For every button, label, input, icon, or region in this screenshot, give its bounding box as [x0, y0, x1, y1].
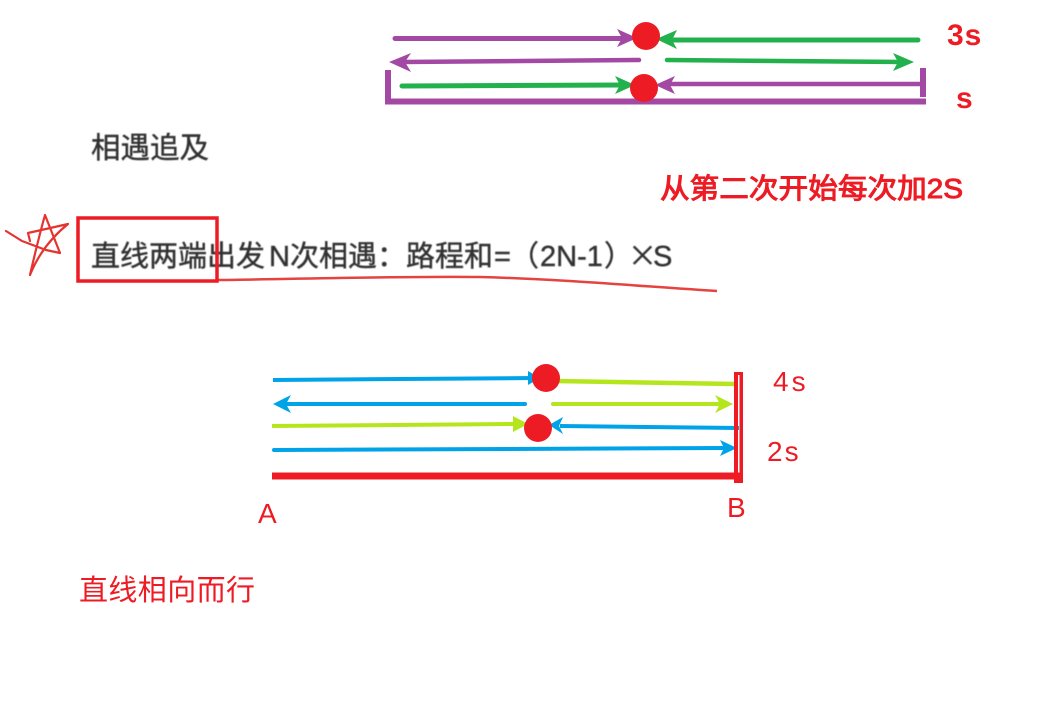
- arrow: purple return: [389, 53, 639, 72]
- arrow: blue return: [273, 395, 525, 413]
- meeting point: upper: [532, 364, 560, 392]
- arrow: lime second trip: [272, 416, 528, 432]
- label: s: s: [956, 82, 973, 115]
- underline stroke: [218, 277, 717, 291]
- formula: =: [494, 241, 511, 273]
- formula: N: [269, 241, 290, 273]
- formula: 2N-1: [540, 241, 603, 273]
- formula: （: [510, 241, 539, 273]
- arrow: green return: [667, 53, 914, 71]
- label: 4s: 4s: [773, 366, 809, 397]
- arrow: green first trip: [656, 30, 918, 49]
- formula: 直线两端出发: [91, 240, 265, 273]
- formula: S: [653, 241, 672, 273]
- meeting point: first: [632, 22, 660, 50]
- label: A: A: [258, 498, 277, 529]
- meeting point: lower: [524, 414, 552, 442]
- formula: ×: [628, 233, 657, 275]
- B end wall: [734, 372, 743, 483]
- caption: 直线相向而行: [79, 574, 255, 607]
- formula: 次相遇：路程和: [290, 240, 493, 273]
- red highlight box: [78, 218, 217, 281]
- arrow: lime first trip: [556, 381, 735, 384]
- meeting point: second: [630, 74, 658, 102]
- label: 3s: 3s: [947, 19, 982, 52]
- bottom diagram: A to B, blue and lime: [272, 364, 743, 483]
- label: 2s: 2s: [767, 436, 801, 467]
- heading: 相遇追及: [91, 132, 209, 165]
- arrow: blue first trip: [273, 371, 540, 385]
- arrow: green second trip: [402, 76, 635, 94]
- arrow: blue second trip: [549, 417, 739, 434]
- arrow: lime return: [553, 395, 733, 413]
- arrow: purple first trip: [395, 29, 637, 47]
- icon: hand-drawn star: [6, 215, 68, 275]
- formula: ）: [604, 241, 633, 273]
- top diagram: two-end meetings, purple and green: [388, 22, 926, 102]
- red distance bar: [272, 472, 742, 480]
- arrow: blue full run: [274, 440, 737, 456]
- purple distance bracket: [388, 68, 926, 102]
- arrow: purple second trip: [655, 76, 921, 94]
- label: B: B: [727, 492, 746, 523]
- red note: 从第二次开始每次加2S: [660, 173, 963, 204]
